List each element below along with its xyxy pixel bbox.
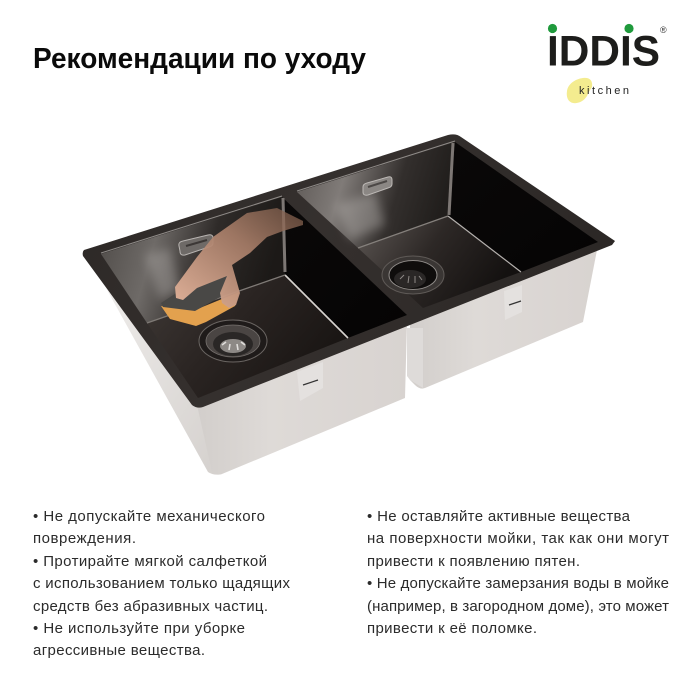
logo wordmark: IDDIS — [547, 28, 660, 76]
text block: left column: средств без абразивных частиц. — [33, 598, 268, 615]
sink body: right bowl exterior — [410, 250, 597, 389]
yellow blob — [567, 78, 592, 103]
text block: right column: (например, в загородном доме), это может — [367, 598, 669, 615]
drain left — [199, 320, 267, 362]
hand — [175, 208, 303, 308]
sink body: left bowl side — [106, 288, 222, 475]
right wall — [282, 197, 407, 338]
kitchen label: kitchen — [579, 85, 629, 97]
text block: left column: агрессивные вещества. — [33, 642, 205, 659]
text block: right column: на поверхности мойки, так как они могут — [367, 530, 669, 547]
floor — [358, 216, 521, 308]
overflow right — [363, 177, 392, 195]
sink body: gap between bowls — [407, 328, 423, 388]
sink body: left bowl front — [197, 322, 407, 475]
right bowl — [297, 141, 598, 308]
sponge — [161, 275, 239, 326]
registered mark: ® — [660, 25, 667, 35]
left bowl — [101, 196, 407, 398]
sponge dark layer — [161, 275, 232, 311]
text block: right column: привести к её поломке. — [367, 620, 537, 637]
floor — [147, 275, 348, 398]
drain right — [382, 256, 444, 294]
text block: right column: • Не допускайте замерзания воды в мойке — [367, 575, 669, 592]
text block: left column: • Протирайте мягкой салфеткой — [33, 553, 267, 570]
front tab right — [504, 285, 522, 320]
title: Рекомендации по уходу — [33, 43, 366, 75]
back wall sheen — [145, 248, 180, 300]
text block: left column — [33, 508, 290, 659]
front tab left — [297, 362, 323, 401]
back wall — [101, 197, 285, 323]
text block: right column: • Не оставляйте активные вещества — [367, 508, 631, 525]
logo: IDDIS kitchen — [547, 24, 667, 103]
text block: left column: с использованием только щадящих — [33, 575, 290, 592]
highlights — [101, 196, 348, 338]
text block: right column — [367, 508, 669, 637]
right wall — [448, 142, 598, 272]
text block: left column: • Не допускайте механического — [33, 508, 265, 525]
sponge yellow layer — [161, 292, 239, 326]
sink illustration — [83, 134, 615, 475]
text block: left column: повреждения. — [33, 530, 136, 547]
back wall sheen — [335, 192, 385, 240]
highlights — [297, 141, 521, 272]
overflow left — [179, 235, 213, 255]
back wall — [297, 142, 455, 248]
rim top — [83, 134, 615, 408]
text block: right column: привести к появлению пятен. — [367, 553, 580, 570]
text block: left column: • Не используйте при уборке — [33, 620, 245, 637]
logo green dots — [548, 24, 634, 33]
